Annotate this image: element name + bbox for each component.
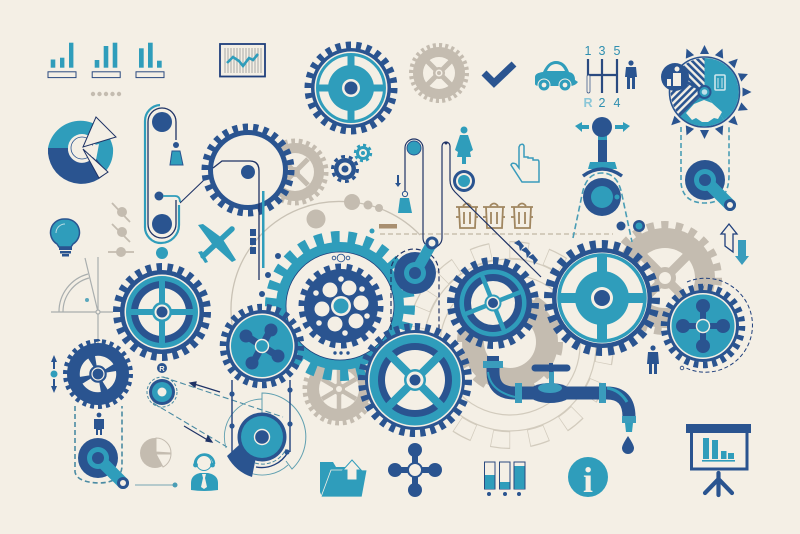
fan gear lower left bbox=[223, 307, 301, 385]
small navy solid gear bbox=[66, 342, 130, 406]
icon: hand pointer bbox=[511, 144, 539, 182]
large teal gear bbox=[272, 238, 408, 374]
icon: car bbox=[535, 61, 578, 91]
icon: airplane bbox=[198, 224, 236, 263]
thin background arc bbox=[231, 201, 420, 345]
left gear bbox=[117, 267, 207, 357]
beige gear top centre bbox=[412, 46, 466, 100]
icon: pie chart beige bbox=[140, 438, 171, 468]
R badge bbox=[157, 363, 167, 373]
icon: woman bbox=[455, 126, 473, 164]
icon: battery level bars bbox=[484, 462, 525, 496]
belt lines centre bbox=[405, 139, 541, 277]
gear shift diagram bbox=[583, 44, 621, 110]
lower disc with wedge bbox=[224, 380, 306, 477]
gear shift diagram: 2 bbox=[599, 96, 606, 110]
crank right with dashed belt bbox=[681, 127, 736, 211]
dots under navy gear bbox=[333, 351, 350, 355]
connector line bbox=[135, 482, 178, 488]
ring under woman bbox=[453, 170, 475, 192]
dashed arc around right gear bbox=[680, 278, 752, 372]
small wheel bbox=[147, 377, 177, 407]
background outline gear bbox=[415, 250, 605, 440]
large wheel gear bottom centre bbox=[362, 327, 468, 433]
protractor lines bbox=[51, 257, 113, 345]
icon: man above crank bbox=[94, 413, 104, 435]
icon: headset person bbox=[191, 454, 218, 491]
icon: light bulb bbox=[51, 219, 79, 256]
pie gear top right bbox=[661, 45, 752, 139]
icon: info bbox=[568, 457, 608, 500]
trash cans row bbox=[456, 204, 533, 228]
small rings above navy gear bbox=[332, 254, 350, 262]
teal vertical bar bbox=[262, 191, 264, 268]
icon: cross connector bbox=[388, 443, 442, 497]
beige sliders bbox=[108, 203, 134, 257]
gear shift diagram: 4 bbox=[614, 96, 621, 110]
dot row bbox=[91, 92, 121, 96]
large right gear bbox=[548, 244, 656, 352]
conveyor belt left bbox=[145, 105, 204, 243]
gear shift diagram: 3 bbox=[599, 44, 606, 58]
navy squares bbox=[250, 229, 256, 254]
R badge: R bbox=[159, 364, 165, 373]
teal dot over left gear bbox=[156, 247, 168, 259]
dashed belt lines bbox=[153, 377, 283, 447]
direction arrows bbox=[184, 382, 220, 442]
line chart icon bbox=[220, 44, 265, 76]
crank centre bbox=[391, 236, 439, 330]
icon: check mark bbox=[484, 64, 514, 83]
icon: folder bbox=[320, 460, 367, 497]
top gear bbox=[308, 46, 394, 130]
teal small dot bbox=[370, 228, 374, 234]
icon: info: i bbox=[583, 460, 593, 500]
fan gear right bbox=[664, 287, 742, 365]
small joint dots bbox=[616, 220, 645, 232]
crank bottom left with dashed belt bbox=[75, 406, 129, 489]
icon: man right bbox=[647, 345, 659, 374]
beige gear behind upper gear bbox=[264, 141, 326, 203]
gear shift diagram: 5 bbox=[614, 44, 621, 58]
beige gear right bbox=[612, 225, 718, 331]
icon: man bbox=[625, 60, 637, 89]
tan bar bbox=[379, 224, 397, 228]
icon: up and down arrows bbox=[721, 224, 749, 265]
joystick bbox=[573, 117, 632, 242]
donut chart bbox=[48, 117, 116, 184]
pulley with weight bbox=[395, 141, 448, 213]
chevrons bbox=[514, 240, 538, 265]
bar chart icons bbox=[48, 43, 164, 78]
centre right curved spoke gear bbox=[451, 261, 535, 345]
gear shift diagram: 1 bbox=[585, 44, 592, 58]
gear shift diagram: R bbox=[583, 96, 593, 110]
icon: up down arrows with dot bbox=[50, 355, 58, 393]
dashed horizontal line bbox=[380, 233, 613, 235]
navy dots bbox=[259, 253, 281, 297]
small gear pair bbox=[332, 145, 371, 182]
tap bbox=[483, 356, 636, 454]
beige scattered circles bbox=[306, 194, 383, 228]
upper left gear bbox=[205, 127, 291, 280]
beige gear lower centre bbox=[305, 355, 373, 423]
beige gear behind tap bbox=[460, 292, 560, 392]
icon: presentation board bbox=[686, 424, 751, 495]
navy gear with holes bbox=[302, 266, 380, 346]
